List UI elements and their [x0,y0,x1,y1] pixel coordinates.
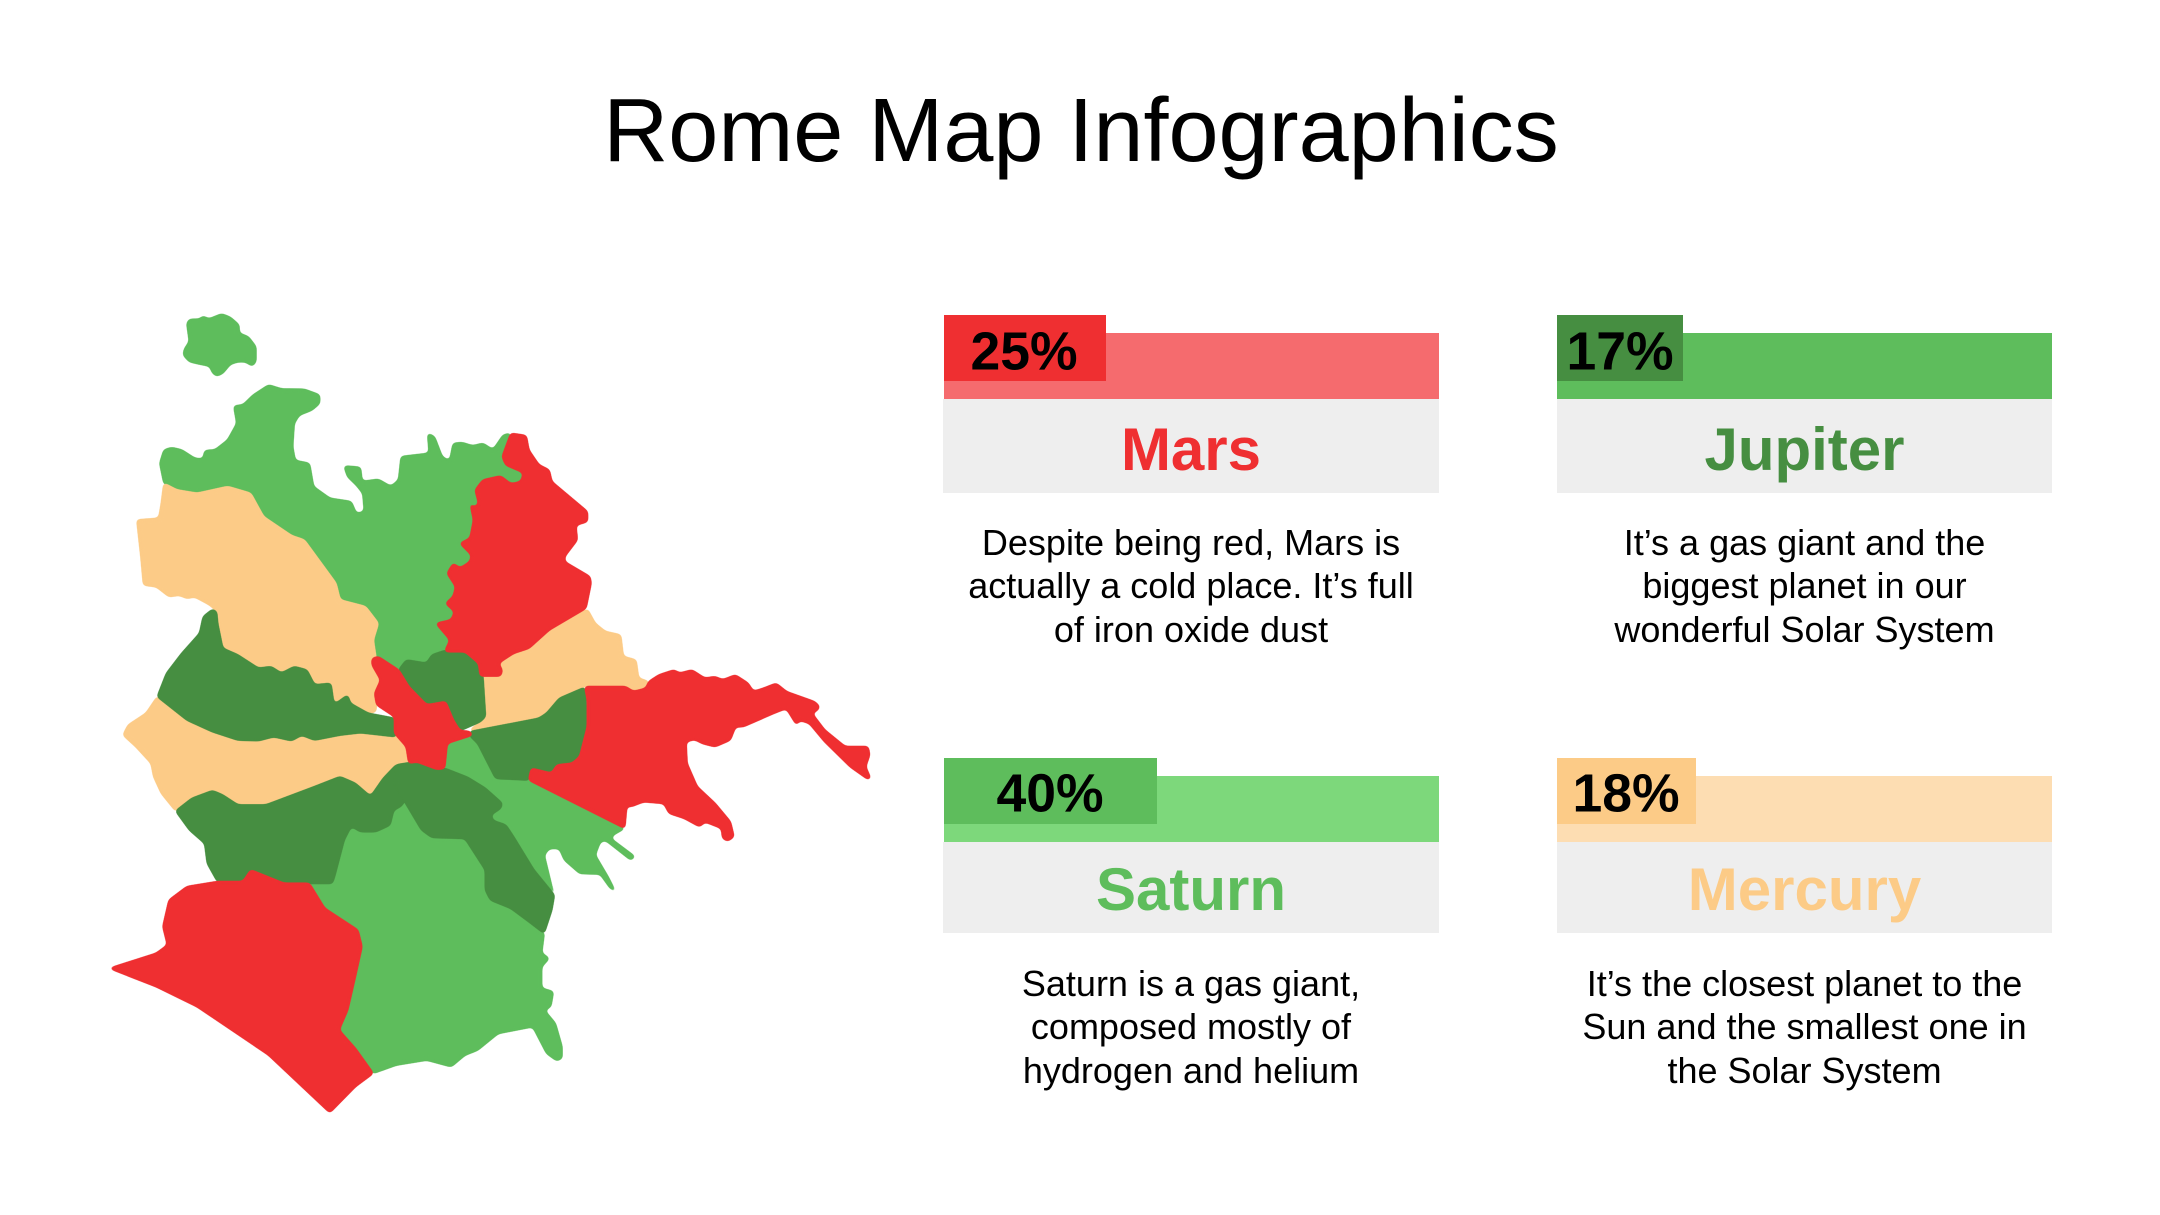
badge: Saturn [944,758,1157,824]
region: central red [372,657,473,769]
value: Jupiter: 17% [1566,322,1674,382]
region: northeast red [436,433,591,676]
region: southeast green [445,736,635,895]
description: Saturn: composed mostly of [1031,1006,1352,1047]
name box: Saturn [943,842,1439,933]
region: east dark green [470,687,587,780]
badge: Mars [944,315,1106,381]
badge: Mercury [1557,758,1696,824]
region: north green [160,385,524,670]
name box: Mars [943,399,1439,493]
name: Saturn: Saturn [1096,856,1286,923]
description: Jupiter: wonderful Solar System [1613,609,1995,650]
region: southwest dark green [176,762,422,883]
bar: Jupiter [1557,333,2052,399]
name box: Jupiter [1557,399,2052,493]
panel: Mercury [1557,758,2052,1091]
name: Jupiter: Jupiter [1704,416,1905,483]
name: Mars: Mars [1121,416,1261,483]
description: Mercury: It’s the closest planet to the [1587,963,2022,1004]
region: south green [309,800,562,1073]
description: Mars [968,522,1414,650]
name box: Mercury [1557,842,2052,933]
bar: Mars [944,333,1439,399]
map of Rome [109,314,871,1113]
panel: Jupiter [1557,315,2052,650]
region: west dark green [157,609,396,741]
value: Mercury: 18% [1572,764,1680,824]
description: Mercury [1582,963,2027,1091]
region: west tan [123,697,409,811]
value: Mars: 25% [970,322,1078,382]
value: Saturn: 40% [996,764,1104,824]
description: Saturn [1022,963,1360,1091]
badge: Jupiter [1557,315,1683,381]
bar: Mercury [1557,776,2052,842]
title: Rome Map Infographics [603,81,1559,181]
region: northwest tan [137,483,378,713]
description: Mars: Despite being red, Mars is [982,522,1400,563]
description: Mars: of iron oxide dust [1054,609,1328,650]
panel: Mars [943,315,1439,650]
panel: Saturn [943,758,1439,1091]
description: Mercury: the Solar System [1667,1050,1942,1091]
region: island [183,314,256,376]
region: south dark green strip [394,762,554,933]
bar: Saturn [944,776,1439,842]
region: central dark green [399,651,485,731]
description: Jupiter: It’s a gas giant and the [1624,522,1985,563]
description: Saturn: hydrogen and helium [1023,1050,1359,1091]
region: east tan [470,609,649,733]
description: Mercury: Sun and the smallest one in [1582,1006,2027,1047]
name: Mercury: Mercury [1688,856,1922,923]
description: Jupiter [1613,522,1995,650]
region: east red [529,670,871,841]
description: Jupiter: biggest planet in our [1642,565,1967,606]
description: Saturn: Saturn is a gas giant, [1022,963,1360,1004]
description: Mars: actually a cold place. It’s full [968,565,1414,606]
region: southwest red [109,870,373,1113]
